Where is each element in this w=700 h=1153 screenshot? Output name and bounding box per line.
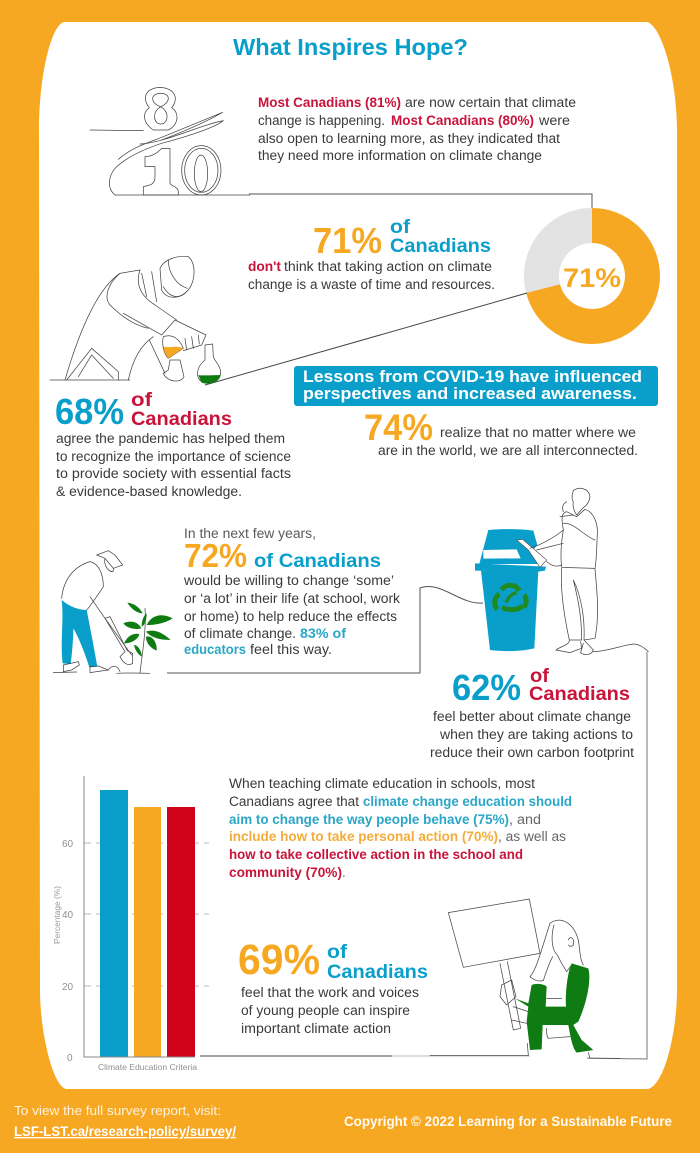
footer: survey link: LSF-LST.ca/research-policy/survey/ [14,1124,236,1139]
banner: Lessons from COVID-19: Lessons from COVID-19 have influenced [303,368,642,386]
icon: person at recycling bin [475,488,648,655]
stat: 68% of Canadians: of [131,390,153,411]
text block: 72% willing to change: In the next few years, [184,526,316,541]
bar chart: climate education criteria [52,776,209,1072]
text block: certain about climate change [258,95,576,163]
footer: copyright: Copyright © 2022 Learning for a Sustainable Future [344,1114,672,1129]
stat: 68% of Canadians: & evidence-based knowledge. [56,484,242,499]
stat: 69% of Canadians: Canadians [327,962,428,983]
text block: 72% willing to change: of Canadians [254,551,381,572]
text block: certain about climate change: Most Canadians (80%) [391,113,534,128]
stat: 62% of Canadians: of [530,666,550,687]
text block: certain about climate change: they need more information on climate change [258,148,542,163]
stat: 62% of Canadians: feel better about climate change [433,709,631,724]
text block: 72% willing to change: or home) to help reduce the effects [184,609,397,624]
title: What Inspires Hope? [233,34,468,60]
footer: survey link: To view the full survey report, visit: [14,1103,221,1118]
text block: 72% willing to change: or ‘a lot’ in their life (at school, work [184,591,400,606]
stat: 71% of Canadians: 71% [313,220,382,261]
stat: 74% interconnected: are in the world, we are all interconnected. [378,443,638,458]
footer: survey link [14,1103,236,1139]
text block: 72% willing to change: educators [184,642,246,657]
text block: 72% willing to change: feel this way. [250,642,332,657]
stat: 71% of Canadians [248,217,495,292]
text block: climate education in schools: , as well as [498,829,566,844]
banner: Lessons from COVID-19: perspectives and increased awareness. [303,385,637,403]
text block: 72% willing to change: 72% [184,537,247,574]
bar chart: climate education criteria: Climate Education Criteria [98,1062,197,1072]
text block: climate education in schools: aim to change the way people behave (75%) [229,812,509,827]
stat: 71% of Canadians: think that taking action on climate [284,259,492,274]
stat: 74% interconnected: realize that no matter where we [440,425,636,440]
icon: 8 out of 10 line drawing [90,87,250,195]
stat: 71% of Canadians: change is a waste of time and resources. [248,277,495,292]
stat: 69% of Canadians: feel that the work and voices [241,985,419,1000]
bar chart: climate education criteria: 0 [67,1053,73,1064]
text block: climate education in schools: how to take collective action in the school and [229,847,523,862]
text block: climate education in schools: community (70%) [229,865,342,880]
stat: 62% of Canadians: 62% [452,667,521,708]
icon: green recycle arrows [495,585,526,610]
stat: 69% of Canadians [238,936,428,1036]
text block: 72% willing to change: 83% of [300,626,347,641]
text block: certain about climate change: change is happening. [258,113,385,128]
bar chart: climate education criteria: 60 [62,839,74,850]
text block: certain about climate change: Most Canadians (81%) [258,95,401,110]
stat: 68% of Canadians: to recognize the importance of science [56,449,291,464]
text block: certain about climate change: also open to learning more, as they indicated that [258,131,560,146]
connector line down the right side [587,652,647,1059]
stat: 62% of Canadians: Canadians [529,684,630,705]
text block: climate education in schools: include how to take personal action (70%) [229,829,498,844]
stat: 68% of Canadians: agree the pandemic has helped them [56,431,285,446]
bar chart: climate education criteria: 20 [62,982,74,993]
text block: certain about climate change: are now certain that climate [405,95,576,110]
stat: 69% of Canadians: of [327,942,348,963]
banner: Lessons from COVID-19 [294,366,658,406]
stat: 71% of Canadians: Canadians [390,236,491,257]
icon: person planting a tree [53,551,173,673]
stat: 74% interconnected: 74% [364,407,433,448]
baseline connector under chart [200,1055,392,1057]
chart: 71% donut [524,208,660,344]
text block: 72% willing to change [183,526,400,657]
stat: 68% of Canadians: to provide society with essential facts [56,466,291,481]
text block: certain about climate change: were [538,113,570,128]
stat: 71% of Canadians: don't [248,259,282,274]
text block: climate education in schools: , and [509,812,541,827]
bar chart: climate education criteria: Percentage (%) [52,886,62,944]
bar chart: climate education criteria: 40 [62,910,74,921]
text block: climate education in schools: When teaching climate education in schools, most [229,776,535,791]
stat: 62% of Canadians [430,666,634,760]
stat: 74% interconnected [364,407,638,458]
stat: 69% of Canadians: 69% [238,936,320,984]
stat: 68% of Canadians: Canadians [131,409,232,430]
text block: 72% willing to change: of climate change. [184,626,296,641]
text block: climate education in schools: . [342,865,346,880]
text block: 72% willing to change: would be willing to change ‘some’ [183,573,394,588]
connector line from donut to flask [205,293,527,385]
connector line to recycling bin [167,586,483,673]
icon: young person holding protest sign [430,899,620,1058]
stat: 62% of Canadians: reduce their own carbon footprint [430,745,634,760]
connector line to donut [249,194,592,208]
stat: 68% of Canadians [55,390,291,499]
stat: 71% of Canadians: of [390,217,411,238]
stat: 62% of Canadians: when they are taking actions to [439,727,633,742]
text block: climate education in schools [229,776,572,880]
stat: 69% of Canadians: of young people can inspire [241,1003,410,1018]
stat: 69% of Canadians: important climate action [241,1021,391,1036]
icon: scientist pouring flask [50,256,221,384]
text block: climate education in schools: Canadians agree that [229,794,359,809]
text block: climate education in schools: climate change education should [363,794,572,809]
chart: 71% donut: 71% [563,263,621,293]
stat: 68% of Canadians: 68% [55,391,124,432]
